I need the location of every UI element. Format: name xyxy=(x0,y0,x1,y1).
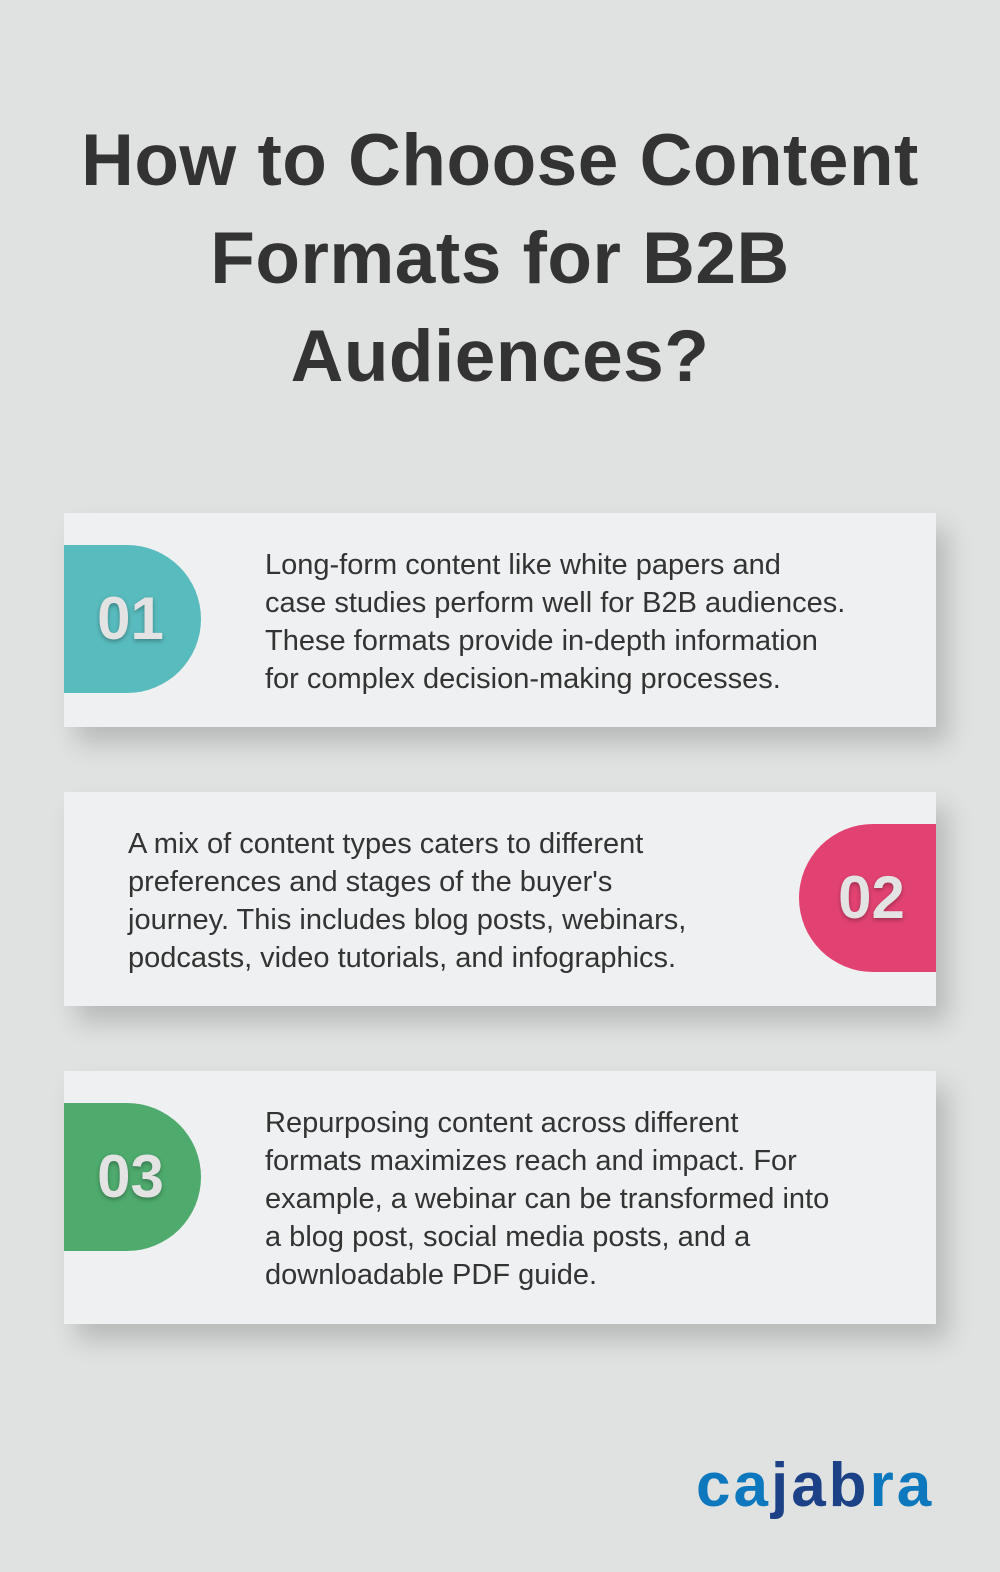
badge 01: 01 xyxy=(97,585,164,652)
text 02: preferences and stages of the buyer's xyxy=(128,866,612,898)
text 01: Long-form content like white papers and xyxy=(265,549,781,581)
panel: card 03 xyxy=(64,1071,936,1324)
text 03: example, a webinar can be transformed into xyxy=(265,1183,829,1215)
text 02: A mix of content types caters to different xyxy=(128,828,643,860)
text 02: journey. This includes blog posts, webinars, xyxy=(128,904,686,936)
text 02 xyxy=(127,828,686,974)
text 01: for complex decision-making processes. xyxy=(265,663,781,695)
text 02: podcasts, video tutorials, and infographics. xyxy=(128,942,676,974)
text 01: These formats provide in-depth information xyxy=(265,625,818,657)
title: How to Choose Content xyxy=(81,120,919,201)
text 03: formats maximizes reach and impact. For xyxy=(265,1145,797,1177)
badge 02 xyxy=(799,824,936,972)
text 01: case studies perform well for B2B audiences. xyxy=(265,587,845,619)
badge 02: 02 xyxy=(838,864,905,931)
badge 03: 03 xyxy=(97,1143,164,1210)
text 03: Repurposing content across different xyxy=(265,1107,738,1139)
text 03 xyxy=(265,1107,829,1291)
title xyxy=(81,120,919,397)
title: Audiences? xyxy=(291,316,709,397)
title: Formats for B2B xyxy=(210,218,790,299)
panel: card 01 xyxy=(64,513,936,727)
badge 03 xyxy=(64,1103,201,1251)
logo: cajabra xyxy=(696,1451,934,1520)
text 01 xyxy=(265,549,845,695)
text 03: a blog post, social media posts, and a xyxy=(265,1221,750,1253)
badge 01 xyxy=(64,545,201,693)
panel: card 02 xyxy=(64,792,936,1006)
text 03: downloadable PDF guide. xyxy=(265,1259,597,1291)
